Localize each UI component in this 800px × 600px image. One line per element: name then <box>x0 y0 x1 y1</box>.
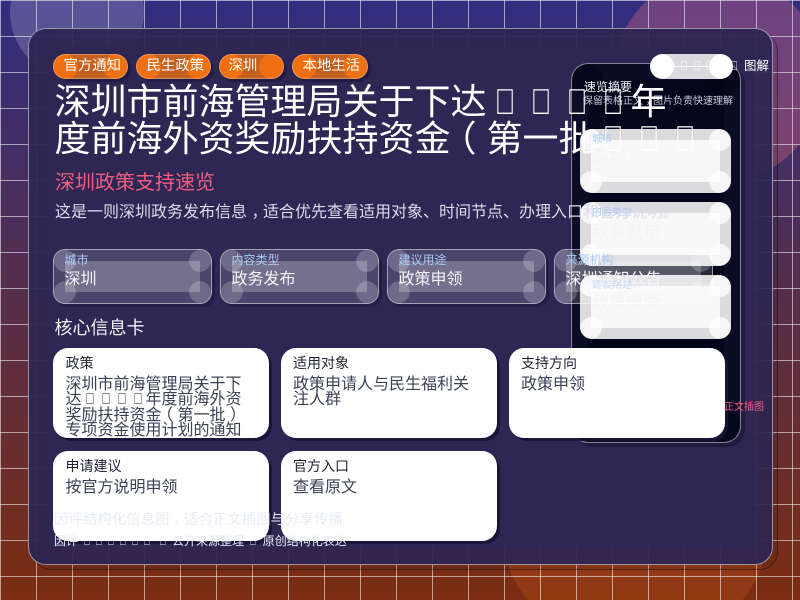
card body: audience: 注人群 <box>293 391 341 408</box>
tag pill: local life <box>292 54 368 79</box>
white pill label:  <box>731 59 738 73</box>
subtitle: 深圳政策支持速览 <box>55 172 215 194</box>
card body: official entry: 查看原文 <box>293 479 357 496</box>
tag pill: livelihood policy <box>136 54 211 79</box>
meta value: source: 深圳通知公告 <box>566 271 662 288</box>
card body: policy:  <box>101 391 110 408</box>
meta value: usage: 政策申领 <box>398 271 463 288</box>
aside heading: 速览摘要 <box>584 80 632 94</box>
footer line 2:  <box>132 534 139 548</box>
aside card: usage <box>580 275 731 339</box>
white pill label:  <box>706 59 713 73</box>
title <box>54 81 695 158</box>
card body: direction: 政策申领 <box>521 376 585 393</box>
footer line 2:  <box>108 534 115 548</box>
footer line 2: 因评 公开来源整理 原创结构化表达 <box>54 534 347 548</box>
tag text: livelihood policy: 民生政策 <box>146 58 204 74</box>
section heading: 核心信息卡 <box>54 318 144 338</box>
footer line 2:  <box>144 534 151 548</box>
aside panel: overview summary <box>571 63 741 443</box>
meta card: content type <box>220 249 379 304</box>
meta label: content type: 内容类型 <box>232 253 280 267</box>
footer line 2:  <box>250 534 257 548</box>
title:  <box>494 81 515 122</box>
title: 度前海外资奖励扶持资金（ 第一批 <box>54 118 595 158</box>
aside card text: type label: 内容类型 <box>592 207 632 218</box>
card: application advice <box>53 451 268 540</box>
card: policy <box>53 348 268 438</box>
meta value: city: 深圳 <box>64 271 97 288</box>
footer line 2:  <box>96 534 103 548</box>
description: 这是一则深圳政务发布信息 ，适合优先查看适用对象、时间节点、办理入口和官方说明。 <box>55 204 679 221</box>
meta label: usage: 建议用途 <box>398 253 447 267</box>
card: official entry <box>281 451 496 540</box>
footer line 1: 因评结构化信息图 ，适合正文插图与分享传播 <box>54 512 343 528</box>
card body: policy:  <box>85 391 94 408</box>
title:  <box>530 81 551 122</box>
aside card text: usage label: 建议用途 <box>592 280 632 291</box>
card title: direction: 支持方向 <box>521 355 577 371</box>
white pill label: 图解 <box>744 59 769 73</box>
footer line 2:  <box>120 534 127 548</box>
aside card text: city value: 深圳 <box>592 147 626 166</box>
tag text: shenzhen: 深圳 <box>228 58 257 74</box>
card: direction <box>509 348 724 438</box>
aside card: content type <box>580 202 731 266</box>
title:  <box>602 118 623 158</box>
card body: policy: 深圳市前海管理局关于下 <box>66 376 242 393</box>
card body: application advice: 按官方说明申领 <box>66 479 178 496</box>
tag text: local life: 本地生活 <box>302 58 360 74</box>
card body: policy: 专项资金使用计划的通知 <box>66 422 242 439</box>
card: audience <box>281 348 496 438</box>
title:  <box>566 81 587 122</box>
card body: audience: 政策申请人与民生福利关 <box>293 376 469 393</box>
card title: official entry: 官方入口 <box>293 458 349 474</box>
aside card text: city label: 城市 <box>592 134 612 145</box>
meta label: source: 来源机构 <box>566 253 614 267</box>
meta card: usage <box>387 249 546 304</box>
aside card text: usage value: 政策申领 <box>592 293 660 312</box>
white pill label <box>668 59 769 73</box>
white pill label:  <box>668 59 675 73</box>
card title: audience: 适用对象 <box>293 355 349 371</box>
card body: policy: 奖励扶持资金（ 第一批 ） <box>66 407 246 424</box>
title:  <box>674 118 695 158</box>
aside card: city <box>580 129 731 193</box>
meta value: content type: 政务发布 <box>232 271 296 288</box>
card body: policy <box>66 375 246 439</box>
white pill label:  <box>693 59 700 73</box>
card body: policy: 达 年度前海外资 <box>66 391 242 408</box>
tag text: official notice: 官方通知 <box>64 58 121 74</box>
title:  <box>602 81 623 122</box>
white pill label:  <box>718 59 725 73</box>
aside card text: type value: 政务发布 <box>592 222 660 241</box>
meta card: source <box>554 249 713 304</box>
card title: policy: 政策 <box>66 355 94 371</box>
footer line 2:  <box>84 534 91 548</box>
meta card: city <box>53 249 212 304</box>
footer line 2:  <box>159 534 166 548</box>
card body: policy:  <box>133 391 142 408</box>
card body: policy:  <box>117 391 126 408</box>
tag pill: official notice <box>53 54 128 79</box>
card body: audience <box>293 375 469 408</box>
white pill label:  <box>681 59 688 73</box>
title:  <box>638 118 659 158</box>
card title: application advice: 申请建议 <box>66 458 122 474</box>
title: 深圳市前海管理局关于下达 年 <box>54 81 667 122</box>
tag pill: shenzhen <box>219 54 284 79</box>
aside subtitle: 保留表格正文 ，图片负责快速理解 <box>583 96 733 107</box>
white pill top right <box>650 54 733 79</box>
aside pink note: 正文插图 <box>724 402 764 413</box>
meta label: city: 城市 <box>64 253 89 267</box>
